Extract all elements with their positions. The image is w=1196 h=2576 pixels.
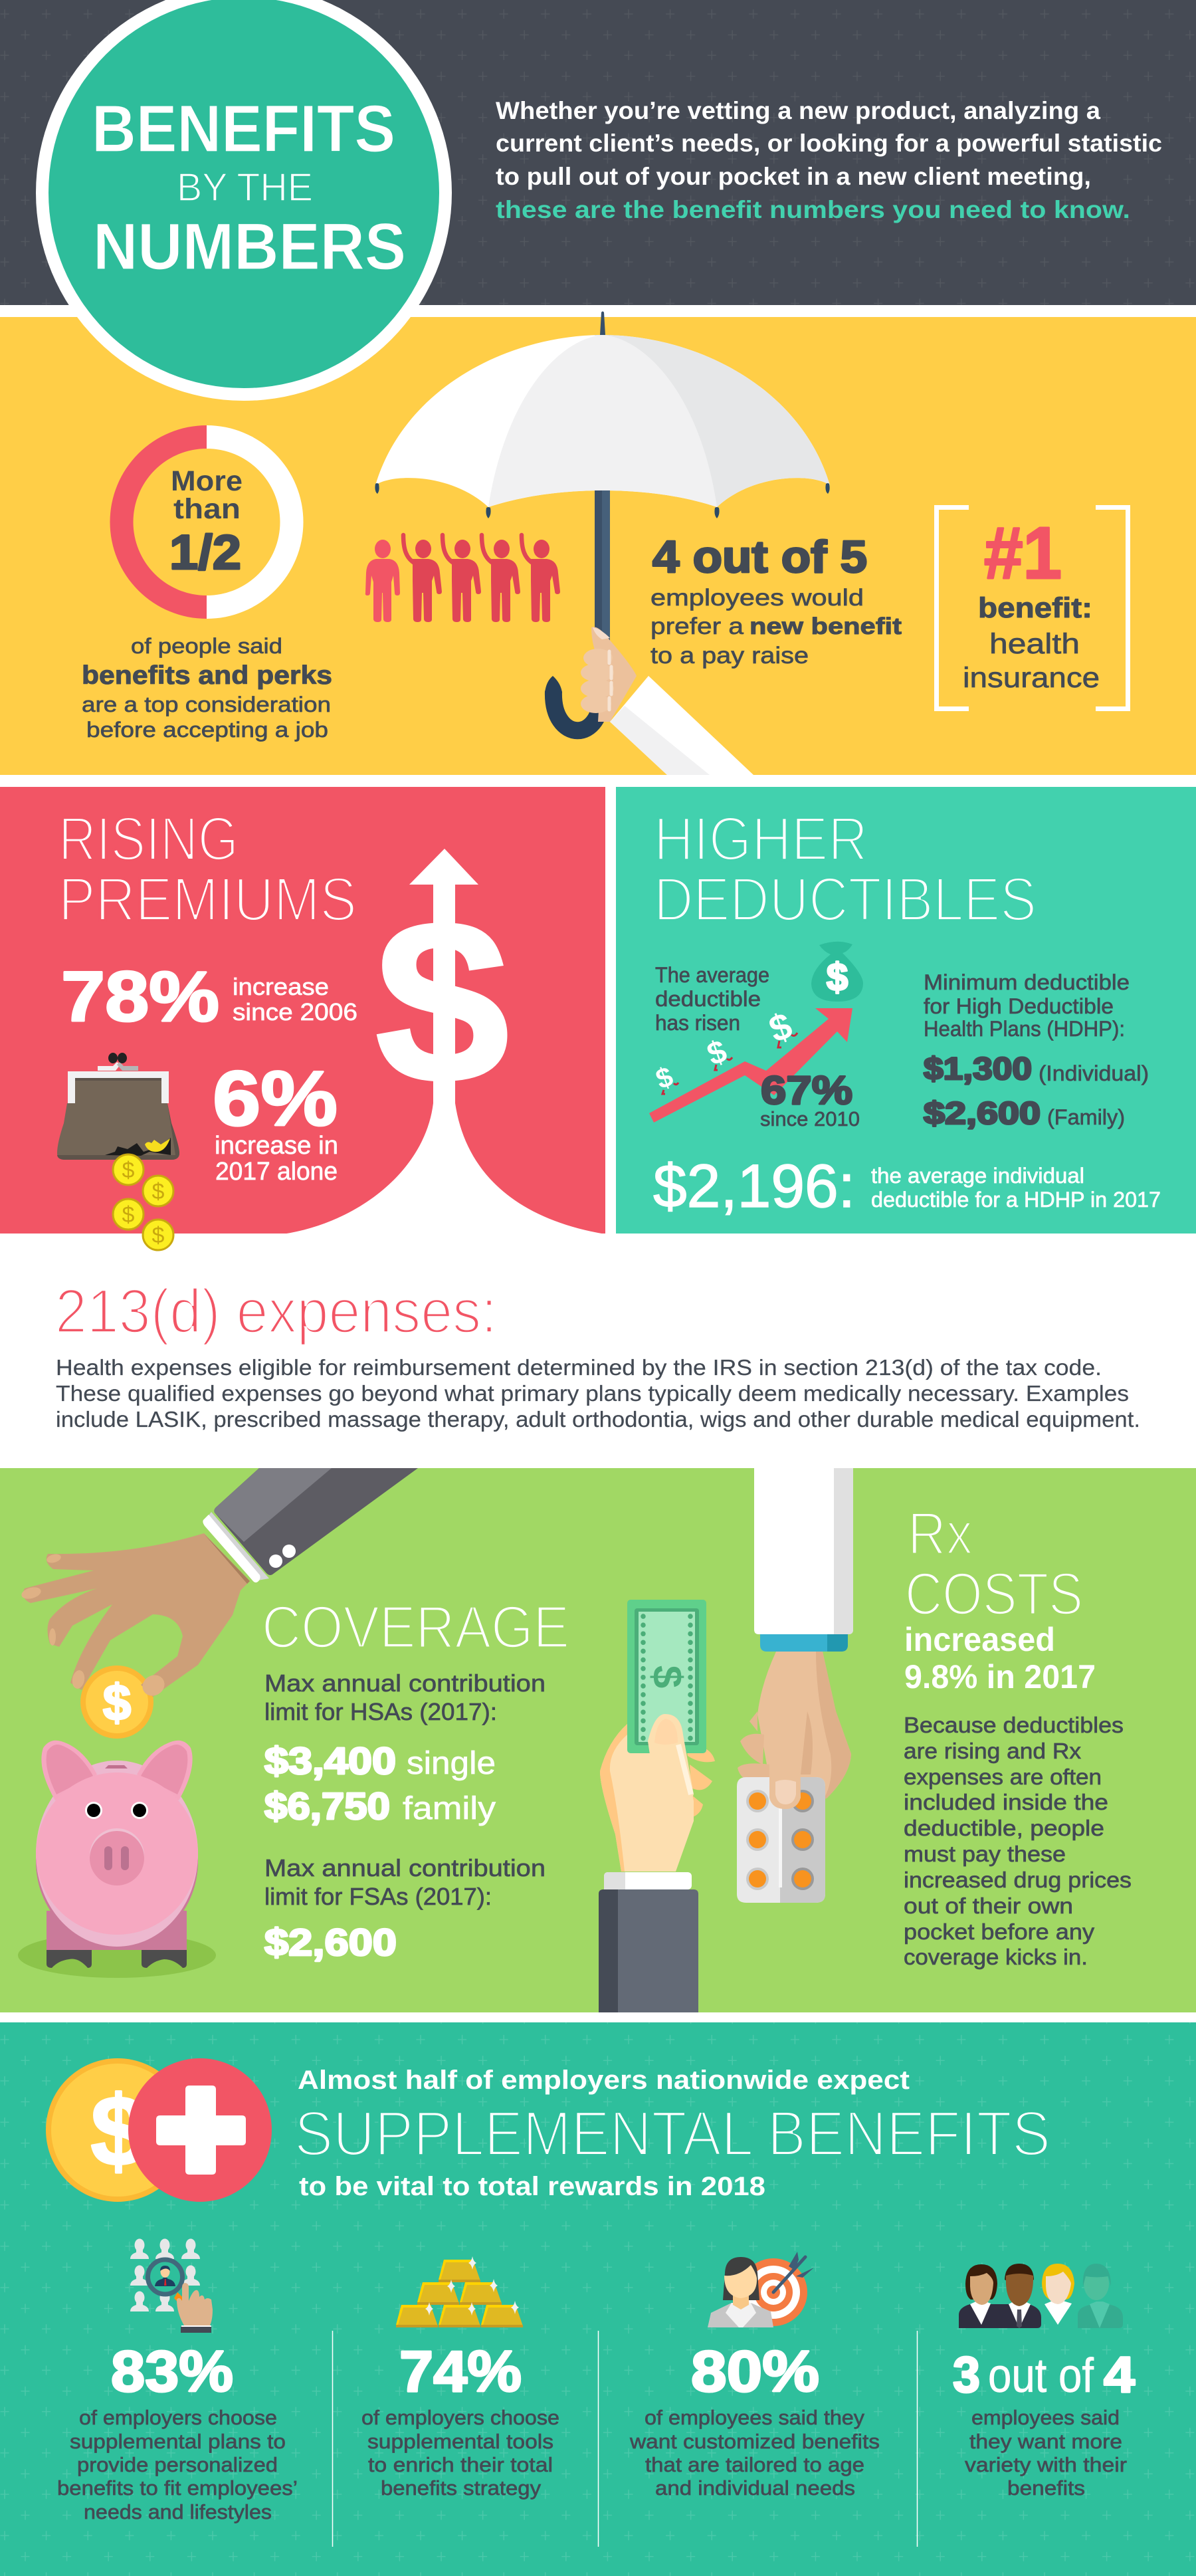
text: HSA limits: Max annual contribution (264, 1669, 546, 1697)
heading: coverage: COVERAGE (262, 1594, 569, 1661)
text: HSA limits: $6,750 (264, 1785, 390, 1828)
text: 4 out of 5: employees would (650, 585, 864, 611)
text: HSA limits (264, 1669, 546, 1828)
paragraph: 213(d) definition (56, 1355, 1140, 1432)
heading: supplemental benefits: to be vital to total rewards in 2018 (299, 2172, 765, 2201)
heading: supplemental benefits: Almost half of employers nationwide expect (298, 2066, 910, 2095)
icon: torn coin purse with falling coins: $ (152, 1223, 165, 1248)
text: 80 percent description (629, 2406, 880, 2500)
text: benefits and perks: benefits and perks (82, 661, 332, 690)
intro paragraph: current client’s needs, or looking for a powerful statistic (496, 130, 1162, 157)
text: HSA limits: family (403, 1791, 496, 1826)
stat: Rx increase (904, 1621, 1096, 1695)
icon: gold bars (396, 2256, 523, 2327)
title badge: NUMBERS (93, 209, 406, 283)
text: 3 out of 4 description (965, 2406, 1127, 2500)
panel: header (0, 0, 1196, 305)
text: minimum deductible: Health Plans (HDHP): (924, 1017, 1125, 1041)
text: 83 percent description (57, 2406, 298, 2523)
heading: supplemental benefits: SUPPLEMENTAL BENEFITS (294, 2098, 1050, 2169)
stat: 6 percent: 6% (213, 1055, 338, 1142)
text: minimum deductible: (Individual) (1039, 1061, 1149, 1085)
stat: 2196 dollars: deductible for a HDHP in 2017 (871, 1188, 1161, 1212)
text: average deductible (655, 963, 769, 1035)
text: 83 percent description: supplemental plans to (70, 2430, 286, 2453)
heading: rising premiums: RISING (58, 804, 239, 873)
icon: money bag (811, 942, 863, 1002)
text: 3 out of 4 description: benefits (1007, 2476, 1085, 2500)
callout: number one benefit bracket: benefit: (978, 592, 1092, 624)
text: 80 percent description: that are tailored to age (645, 2453, 864, 2476)
stat: Rx increase: 9.8% in 2017 (904, 1658, 1096, 1695)
paragraph: Rx explanation: coverage kicks in. (904, 1945, 1088, 1969)
panel: rising premiums (0, 787, 605, 1250)
text: benefits and perks: before accepting a job (86, 718, 328, 742)
icon: coin and medical cross (46, 2058, 272, 2202)
stat: 78 percent: increase (233, 973, 329, 1000)
paragraph: 213(d) definition: These qualified expenses go beyond what primary plans typically deem medically necessary. Examples (56, 1381, 1129, 1406)
chart: rising arrow with running dollars: $ (763, 1004, 797, 1051)
stat: 3 out of 4: out of (988, 2349, 1094, 2403)
paragraph: Rx explanation: are rising and Rx (904, 1739, 1082, 1763)
icon: torn coin purse with falling coins: $ (152, 1179, 165, 1204)
heading: higher deductibles (654, 804, 1037, 934)
paragraph: Rx explanation: out of their own (904, 1893, 1073, 1918)
heading: higher deductibles: DEDUCTIBLES (654, 865, 1037, 934)
text: average deductible: has risen (655, 1011, 740, 1035)
stat: 80 percent: 80% (691, 2339, 819, 2404)
stat: 83 percent: 83% (111, 2339, 233, 2404)
text: HSA limits: single (407, 1746, 496, 1781)
stat: 67 percent: 67% (761, 1068, 852, 1113)
text: 80 percent description: of employees said they (645, 2406, 865, 2429)
title badge (36, 0, 452, 401)
paragraph: Rx explanation: deductible, people (904, 1816, 1104, 1840)
text: 4 out of 5: new benefit (749, 613, 902, 639)
icon: coin and medical cross: $ (90, 2075, 146, 2187)
illustration: hand dropping coin into piggy bank: $ (103, 1675, 131, 1731)
donut chart: more than half: 1/2 (169, 526, 241, 580)
text: 80 percent description: want customized benefits (629, 2430, 880, 2453)
icon: woman with target (708, 2252, 814, 2327)
stat: 6 percent: increase in (215, 1132, 338, 1160)
stat: 78 percent (61, 956, 357, 1036)
callout: number one benefit bracket (937, 508, 1128, 708)
text: 4 out of 5: to a pay raise (650, 643, 809, 669)
donut chart: more than half: than (173, 493, 241, 525)
text: benefits and perks (82, 634, 332, 742)
text: 74 percent description: to enrich their total (368, 2453, 553, 2476)
paragraph: Rx explanation: expenses are often (904, 1765, 1102, 1789)
paragraph: Rx explanation: included inside the (904, 1790, 1108, 1814)
illustration: hands exchanging money for pills (599, 1468, 853, 2012)
icon: torn coin purse with falling coins: $ (122, 1202, 135, 1228)
heading: rising premiums (58, 804, 357, 934)
paragraph: Rx explanation (904, 1713, 1132, 1969)
text: minimum deductible: for High Deductible (924, 994, 1114, 1018)
stat: 2196 dollars (653, 1152, 1161, 1220)
intro paragraph: to pull out of your pocket in a new client meeting, (496, 163, 1091, 190)
icon: group of people raising hands (365, 535, 560, 622)
text: 83 percent description: provide personalized (77, 2453, 278, 2476)
stat: Rx increase: increased (904, 1621, 1055, 1658)
stat: 78 percent: since 2006 (233, 998, 357, 1025)
text: minimum deductible: (Family) (1047, 1105, 1125, 1129)
heading: rising premiums: PREMIUMS (58, 865, 357, 934)
donut chart: more than half (110, 425, 304, 619)
column: customized benefits (629, 2252, 880, 2500)
text: HSA limits: limit for HSAs (2017): (264, 1698, 497, 1725)
text: minimum deductible (924, 970, 1149, 1130)
icon: four employees (959, 2264, 1123, 2328)
text: 83 percent description: needs and lifestyles (84, 2500, 272, 2523)
text: benefits and perks: are a top consideration (82, 693, 331, 716)
stat: 3 out of 4: 3 (953, 2347, 980, 2403)
icon: torn coin purse with falling coins: $ (122, 1158, 135, 1183)
illustration: hand dropping coin into piggy bank (18, 1468, 418, 1978)
text: 4 out of 5: 4 out of 5 (652, 532, 867, 582)
stat: 67 percent (760, 1068, 860, 1130)
heading: higher deductibles: HIGHER (654, 804, 868, 873)
intro paragraph: these are the benefit numbers you need to know. (496, 196, 1130, 223)
stat: 2196 dollars: the average individual (871, 1164, 1084, 1188)
stat: 2196 dollars: $2,196: (653, 1152, 855, 1220)
paragraph: 213(d) definition: Health expenses eligible for reimbursement determined by the IRS in section 213(d) of the tax code. (56, 1355, 1102, 1380)
text: 83 percent description: of employers choose (79, 2406, 277, 2429)
title badge: BY THE (177, 165, 313, 209)
text: FSA limits: $2,600 (264, 1921, 397, 1964)
text: 3 out of 4 description: variety with their (965, 2453, 1127, 2476)
heading: Rx costs (905, 1501, 1083, 1628)
stat: 74 percent: 74% (399, 2339, 522, 2404)
text: FSA limits: Max annual contribution (264, 1854, 546, 1881)
panel: yellow employee benefits (0, 311, 1196, 775)
text: 3 out of 4 description: they want more (969, 2430, 1122, 2453)
chart: rising arrow with running dollars (649, 1004, 852, 1123)
text: 4 out of 5 (650, 532, 902, 669)
donut chart: more than half: More (171, 465, 243, 497)
chart: rising arrow with running dollars: $ (703, 1033, 732, 1073)
text: FSA limits: limit for FSAs (2017): (264, 1883, 492, 1910)
paragraph: Rx explanation: must pay these (904, 1842, 1066, 1866)
heading: Rx costs: Rx (908, 1501, 973, 1567)
text: benefits and perks: of people said (131, 634, 282, 658)
stat: 3 out of 4: 4 (1104, 2347, 1135, 2403)
stat: 78 percent: 78% (61, 956, 219, 1036)
title badge: BENEFITS (92, 92, 395, 166)
panel: supplemental benefits (0, 2022, 1196, 2576)
callout: number one benefit bracket: #1 (984, 512, 1062, 594)
intro paragraph (496, 97, 1162, 223)
text: FSA limits (264, 1854, 546, 1964)
intro paragraph: Whether you’re vetting a new product, analyzing a (496, 97, 1100, 124)
text: minimum deductible: $1,300 (924, 1051, 1032, 1086)
text: 74 percent description: supplemental tools (367, 2430, 553, 2453)
text: average deductible: deductible (655, 987, 761, 1011)
text: 80 percent description: and individual needs (655, 2476, 855, 2500)
callout: number one benefit bracket: insurance (963, 662, 1100, 694)
stat: 67 percent: since 2010 (760, 1107, 860, 1130)
icon: magnifier over people (130, 2238, 213, 2333)
illustration: hands exchanging money for pills: $ (644, 1665, 690, 1688)
heading: 213(d) expenses: 213(d) expenses: (55, 1276, 497, 1346)
text: minimum deductible: $2,600 (924, 1095, 1041, 1130)
panel: 213(d) expenses (55, 1276, 1140, 1432)
panel: coverage and Rx costs (0, 1468, 1196, 2012)
column: personalized plans (57, 2238, 298, 2523)
text: 74 percent description (361, 2406, 559, 2500)
text: average deductible: The average (655, 963, 769, 987)
text: minimum deductible: Minimum deductible (924, 970, 1130, 994)
text: 74 percent description: benefits strategy (381, 2476, 542, 2500)
paragraph: Rx explanation: Because deductibles (904, 1713, 1124, 1737)
text: 3 out of 4 description: employees said (971, 2406, 1120, 2429)
callout: number one benefit bracket: health (989, 628, 1080, 660)
stat: 6 percent (213, 1055, 338, 1186)
paragraph: Rx explanation: pocket before any (904, 1919, 1095, 1944)
icon: dollar sign with rising arrow (282, 849, 605, 1234)
text: 83 percent description: benefits to fit employees’ (57, 2476, 298, 2500)
paragraph: 213(d) definition: include LASIK, prescribed massage therapy, adult orthodontia, wigs and other durable medical equipment. (56, 1407, 1140, 1432)
stat: 6 percent: 2017 alone (215, 1158, 338, 1186)
icon: money bag: $ (827, 956, 848, 999)
text: HSA limits: $3,400 (264, 1740, 396, 1782)
heading: Rx costs: COSTS (905, 1561, 1083, 1628)
text: 74 percent description: of employers choose (361, 2406, 559, 2429)
stat: 3 out of 4 (953, 2347, 1135, 2403)
illustration: umbrella held by hand (375, 311, 830, 775)
chart: rising arrow with running dollars: $ (652, 1060, 677, 1095)
heading: supplemental benefits (294, 2066, 1050, 2201)
column: more variety (953, 2264, 1135, 2500)
paragraph: Rx explanation: increased drug prices (904, 1868, 1132, 1892)
icon: dollar sign with rising arrow: $ (375, 872, 509, 1132)
column: supplemental tools (361, 2256, 559, 2500)
panel: higher deductibles (616, 787, 1196, 1234)
icon: torn coin purse with falling coins (57, 1053, 179, 1250)
text: 4 out of 5: prefer a (650, 613, 744, 639)
